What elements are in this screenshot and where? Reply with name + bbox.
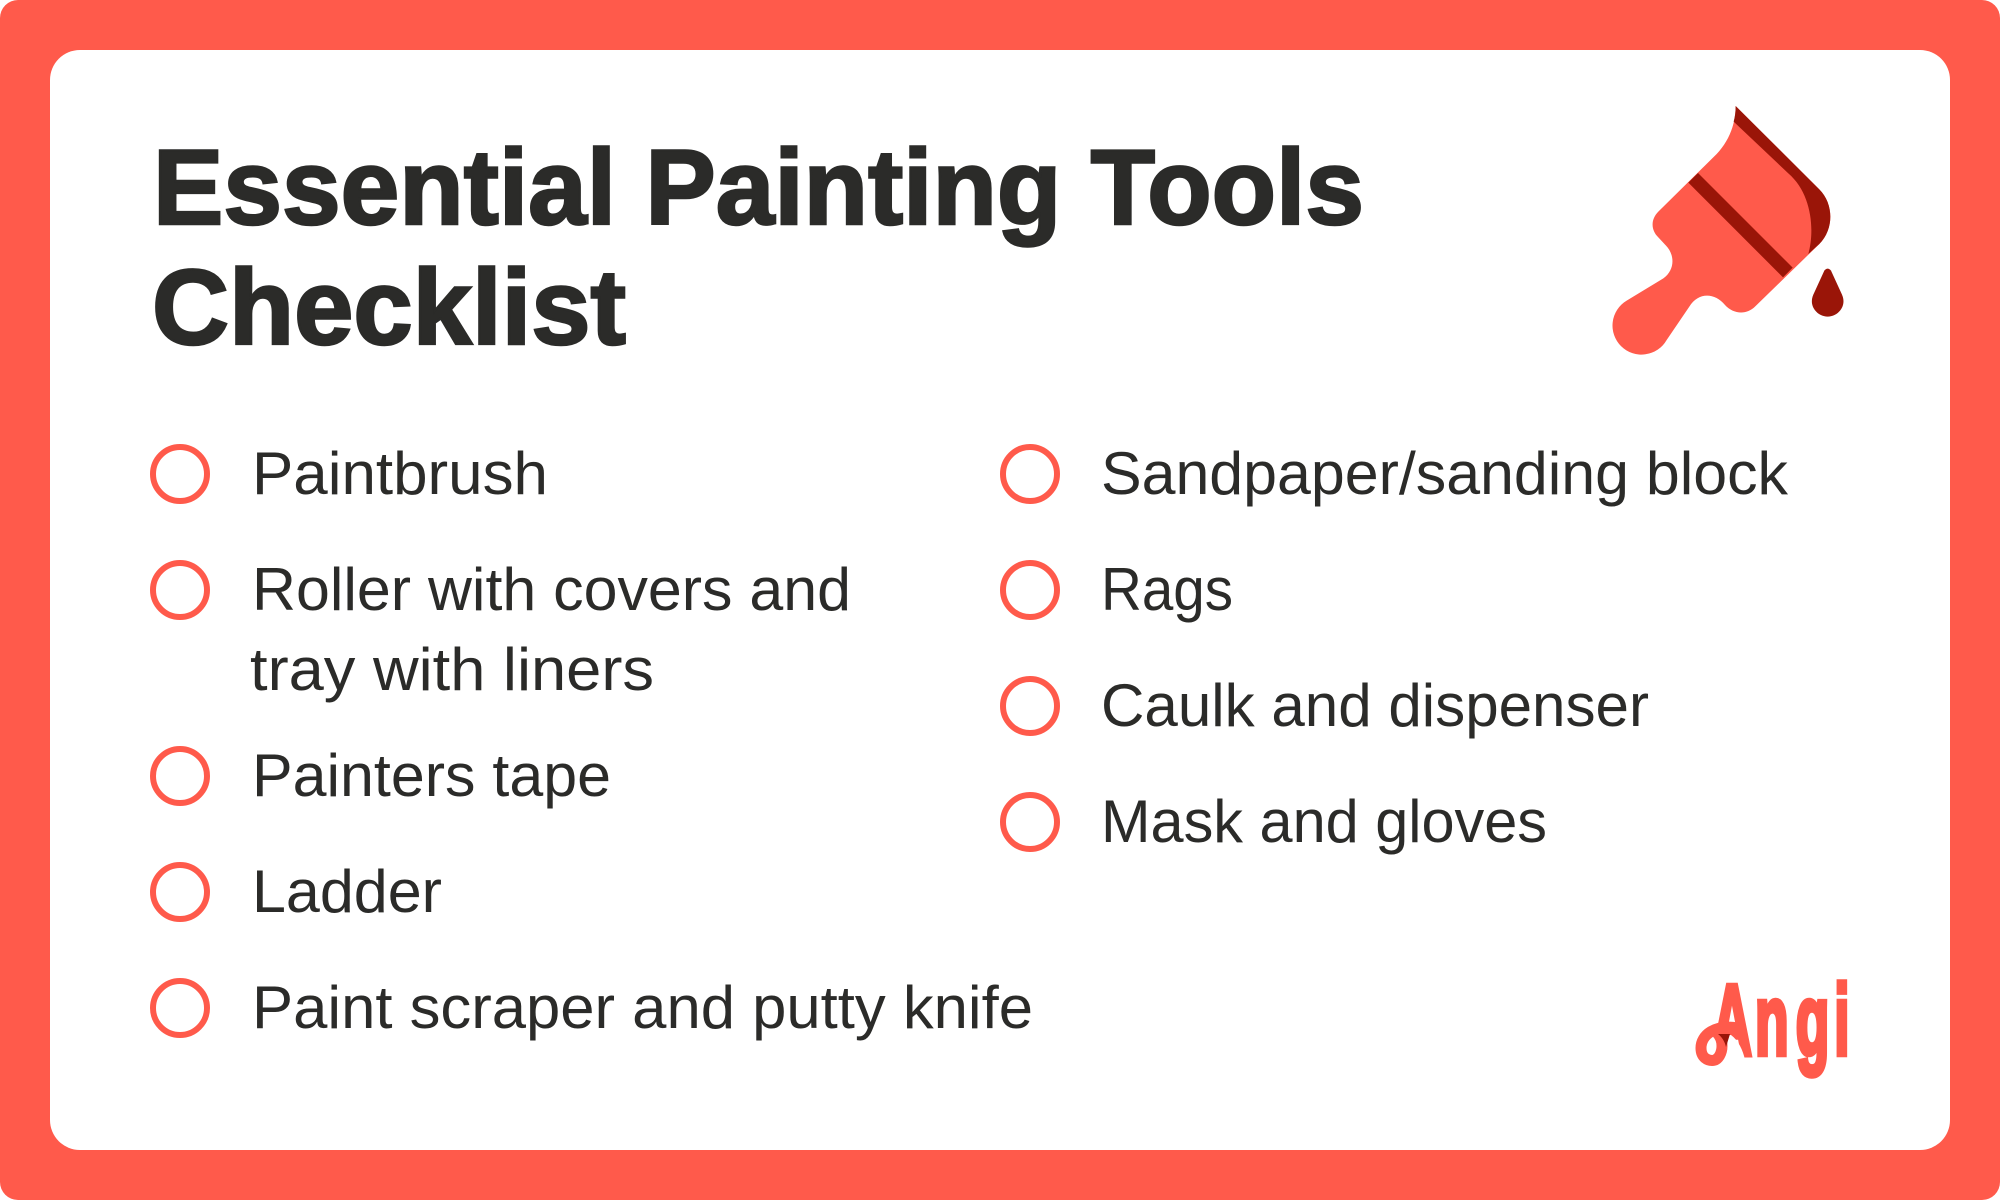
checklist: left column xyxy=(153,440,1033,1041)
item: Mask and gloves: Mask and gloves xyxy=(1101,788,1547,855)
item: Roller with covers and tray with liners xyxy=(153,556,851,703)
item: Ladder xyxy=(153,858,442,925)
item: Roller with covers and tray with liners: tray with liners xyxy=(250,636,654,703)
logo: Angi: Angi xyxy=(1712,965,1850,1077)
title: Essential Painting Tools xyxy=(153,127,1364,247)
item: Sandpaper/sanding block: Sandpaper/sanding block xyxy=(1101,440,1789,507)
item: Rags xyxy=(1003,556,1233,623)
item: Ladder: Ladder xyxy=(252,858,442,925)
title xyxy=(152,127,1364,367)
item: Rags: Rags xyxy=(1101,556,1233,623)
icon: paintbrush with paint drop xyxy=(1613,106,1843,355)
item: Roller with covers and tray with liners: Roller with covers and xyxy=(252,556,851,623)
item: Caulk and dispenser: Caulk and dispenser xyxy=(1101,672,1649,739)
title: Checklist xyxy=(152,247,626,367)
item: Paint scraper and putty knife: Paint scraper and putty knife xyxy=(252,974,1033,1041)
checklist: right column xyxy=(1003,440,1789,855)
item: Paintbrush: Paintbrush xyxy=(252,440,548,507)
item: Painters tape: Painters tape xyxy=(252,742,611,809)
